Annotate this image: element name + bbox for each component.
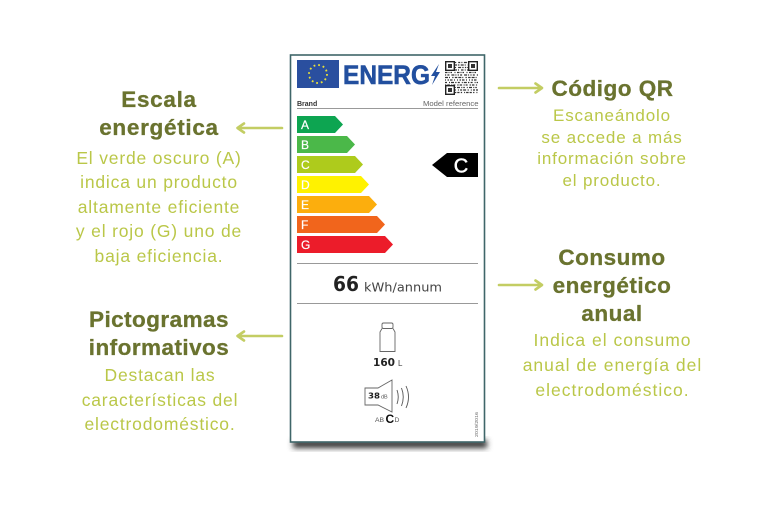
bar G: G — [301, 238, 310, 252]
energy scale bars — [297, 116, 393, 253]
bar F: F — [301, 218, 308, 232]
icon: bottle volume — [380, 323, 395, 352]
text: pictograms description: electrodoméstico. — [84, 414, 236, 434]
icon: speaker noise: dB — [381, 394, 388, 400]
heading: annual consumption: anual — [581, 301, 643, 326]
heading: energy scale: Escala — [121, 87, 197, 112]
text: energy scale description: indica un producto — [80, 172, 238, 192]
text: energy scale description: El verde oscuro (A) — [76, 148, 242, 168]
regulation number: 2019/2016 — [474, 411, 479, 437]
text: consumption description: electrodoméstico. — [535, 380, 690, 400]
bar D: D — [301, 178, 310, 192]
arrow: QR code — [498, 82, 544, 94]
bar C: C — [301, 158, 310, 172]
arrow: pictograms — [236, 330, 284, 342]
heading: energy scale: energética — [99, 115, 219, 140]
text: consumption description: anual de energía del — [523, 355, 702, 375]
noise class scale: C — [386, 412, 394, 426]
volume value: L — [398, 359, 403, 368]
annual consumption: 66 — [333, 272, 359, 296]
arrow: energy scale — [236, 122, 284, 134]
text: consumption description: Indica el consumo — [533, 330, 692, 350]
heading: pictograms: Pictogramas — [89, 307, 229, 332]
heading: annual consumption: Consumo — [558, 245, 666, 270]
text: energy scale description: altamente eficiente — [78, 197, 240, 217]
panel: energy label — [288, 54, 492, 452]
volume value: 160 — [373, 356, 395, 369]
icon: speaker noise: 38 — [368, 392, 380, 400]
noise class scale — [375, 412, 400, 426]
bar B: B — [301, 138, 309, 152]
energy wordmark: ENERG — [343, 60, 430, 90]
icon: QR code — [445, 61, 478, 95]
icon: speaker noise — [365, 380, 408, 412]
text: energy scale description — [76, 148, 242, 266]
heading: QR code: Código QR — [552, 76, 673, 101]
icon: EU flag — [297, 60, 339, 88]
rating marker C: C — [454, 156, 468, 178]
heading: pictograms: informativos — [89, 335, 229, 360]
text: QR description: se accede a más — [541, 128, 683, 147]
text: pictograms description: características del — [82, 390, 238, 410]
heading: pictograms — [89, 307, 229, 360]
annual consumption: kWh/annum — [364, 280, 442, 296]
text: energy scale description: baja eficiencia. — [95, 246, 223, 266]
heading: annual consumption — [553, 245, 671, 326]
rating marker C — [432, 153, 478, 178]
annual consumption — [333, 272, 442, 296]
text: pictograms description — [82, 365, 238, 434]
text: pictograms description: Destacan las — [104, 365, 216, 385]
model reference text: Model reference — [423, 99, 478, 108]
bar E: E — [301, 198, 309, 212]
text: energy scale description: y el rojo (G) uno de — [76, 221, 242, 241]
noise class scale: AB — [375, 417, 385, 424]
arrow: consumption — [498, 279, 544, 291]
text: consumption description — [523, 330, 702, 400]
brand text: Brand — [297, 101, 317, 108]
heading: energy scale — [99, 87, 219, 140]
text: QR description: información sobre — [537, 149, 687, 168]
noise class scale: D — [394, 417, 400, 424]
icon: energy bolt — [431, 64, 440, 85]
text: QR description: el producto. — [562, 171, 662, 190]
bar A: A — [301, 118, 309, 132]
text: QR description — [537, 106, 687, 190]
text: QR description: Escaneándolo — [553, 106, 671, 125]
heading: annual consumption: energético — [553, 273, 671, 298]
